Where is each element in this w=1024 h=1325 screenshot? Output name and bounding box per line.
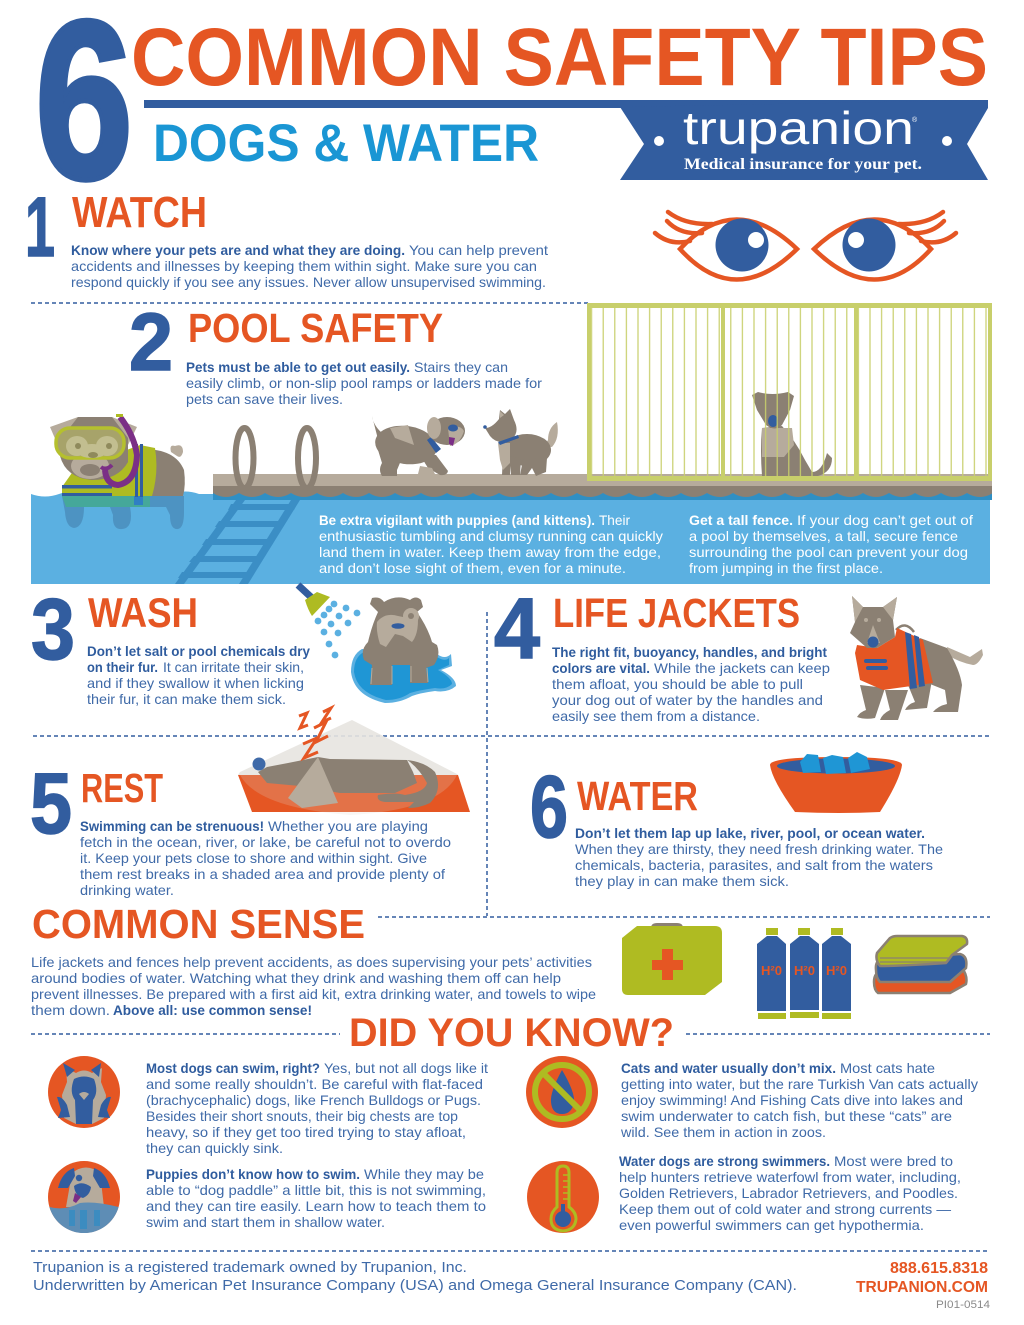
footer legal text: Underwritten by American Pet Insurance Company (USA) and Omega General Insurance Company (CAN). (33, 1277, 797, 1294)
footer contact: TRUPANION.COM (856, 1279, 988, 1296)
section 1 text (71, 242, 548, 290)
common sense text: Life jackets and fences help prevent accidents, as does supervising your pets’ activities (31, 954, 592, 970)
icon: stack of towels (874, 936, 967, 993)
underwater ladder (175, 500, 300, 584)
fact: puppies (146, 1166, 486, 1230)
section 3 text: their fur, it can make them sick. (87, 691, 286, 707)
fact: cats: enjoy swimming! And Fishing Cats dive into lakes and (621, 1092, 963, 1108)
section 1 text: Know where your pets are and what they are doing. (71, 242, 405, 258)
fact: puppies: Puppies don’t know how to swim. (146, 1166, 360, 1182)
fact: water dogs: Most were bred to (834, 1153, 953, 1169)
section 4 heading: LIFE JACKETS (553, 590, 800, 636)
fact: water dogs (619, 1153, 961, 1233)
icon: shower and wet bulldog (298, 585, 456, 703)
fact: dogs swimming: heavy, so if they get too tired trying to stay afloat, (146, 1124, 466, 1140)
section 5 text: Swimming can be strenuous! (80, 818, 264, 834)
section 4 text (552, 644, 830, 724)
section 4 text: While the jackets can keep (654, 660, 830, 676)
fact: water dogs: Keep them out of cold water and strong currents — (619, 1201, 951, 1217)
fence (587, 303, 992, 481)
icon: dog behind fence (752, 392, 832, 476)
fact: puppies: While they may be (364, 1166, 484, 1182)
fact: water dogs: even powerful swimmers can get hypothermia. (619, 1217, 924, 1233)
icon: no water badge (526, 1056, 598, 1128)
section 2 text: Stairs they can (414, 359, 508, 375)
icon: eyes (655, 212, 956, 280)
section 3 heading: WASH (88, 589, 198, 636)
common sense text: prevent illnesses. Be prepared with a first aid kit, extra drinking water, and towels to wipe (31, 986, 596, 1002)
did you know heading: DID YOU KNOW? (349, 1011, 674, 1055)
icon: kitten (483, 409, 558, 476)
header rule (144, 100, 988, 108)
section 4 text: your dog out of water by the handles and (552, 692, 823, 708)
icon: pug with snorkel (50, 414, 185, 529)
subtitle: DOGS & WATER (153, 114, 539, 173)
icon: water bottles: H²0 (794, 963, 815, 978)
section 3 number: 3 (31, 582, 75, 678)
fact: puppies: able to “dog paddle” a little bit, this is not swimming, (146, 1182, 486, 1198)
icon: resting dog on mat (238, 708, 470, 815)
pool text: tall fence: a pool by themselves, a tall, secure fence (689, 528, 958, 544)
pool text: tall fence: from jumping in the first place. (689, 560, 883, 576)
section 5 heading: REST (81, 765, 163, 811)
icon: thermometer badge (527, 1161, 599, 1233)
fact: dogs swimming: Besides their short snouts, their big chests are top (146, 1108, 458, 1124)
section 3 text: and if they swallow it when licking (87, 675, 304, 691)
footer contact (856, 1260, 990, 1311)
section 1 text: accidents and illnesses by keeping them within sight. Make sure you can (71, 258, 537, 274)
common sense text: them down. (31, 1002, 110, 1018)
footer legal text (33, 1259, 797, 1294)
section 6 heading: WATER (577, 773, 698, 819)
icon: puppy swimming badge (48, 1161, 120, 1233)
section 4 text: colors are vital. (552, 660, 650, 676)
icon: dog in life jacket (850, 596, 983, 720)
section 3 text: It can irritate their skin, (163, 659, 304, 675)
fact: puppies: and they can tire easily. Learn how to teach them to (146, 1198, 486, 1214)
section 5 text: Whether you are playing (268, 818, 428, 834)
trupanion ribbon logo: Medical insurance for your pet. (684, 156, 922, 173)
pool text: puppies and kittens: land them in water. Keep them away from the edge, (319, 544, 661, 560)
trupanion ribbon logo: ® (912, 116, 918, 124)
section 2 text: pets can save their lives. (186, 391, 343, 407)
fact: water dogs: help hunters retrieve waterfowl from water, including, (619, 1169, 961, 1185)
section 5 text (80, 818, 451, 898)
icon: water bottles: H²0 (826, 963, 847, 978)
section 4 text: them afloat, you should be able to pull (552, 676, 803, 692)
pool text: puppies and kittens (319, 512, 663, 576)
fact: cats: getting into water, but the rare Turkish Van cats actually (621, 1076, 978, 1092)
section 6 text (575, 825, 943, 889)
pool text: tall fence (689, 512, 973, 576)
fact: dogs swimming (146, 1060, 488, 1156)
pool deck (213, 474, 992, 500)
fact: cats: Most cats hate (840, 1060, 935, 1076)
fact: cats: swim underwater to catch fish, but these “cats” are (621, 1108, 952, 1124)
section 1 text: You can help prevent (409, 242, 548, 258)
common sense text: Above all: use common sense! (113, 1002, 312, 1018)
footer legal text: Trupanion is a registered trademark owned by Trupanion, Inc. (33, 1259, 467, 1276)
section 5 text: fetch in the ocean, river, or lake, be careful not to overdo (80, 834, 451, 850)
section 3 text: on their fur. (87, 659, 158, 675)
fact: cats: Cats and water usually don’t mix. (621, 1060, 836, 1076)
section 2 heading: POOL SAFETY (188, 305, 443, 351)
vertical divider (486, 612, 488, 916)
common sense text (31, 954, 596, 1018)
fact: water dogs: Water dogs are strong swimmers. (619, 1153, 830, 1169)
section 4 number: 4 (494, 581, 540, 677)
pool text: puppies and kittens: Be extra vigilant with puppies (and kittens). (319, 512, 595, 528)
section 6 text: When they are thirsty, they need fresh drinking water. The (575, 841, 943, 857)
icon: water bowl with ice (770, 752, 902, 813)
section 1 heading: WATCH (72, 188, 207, 237)
section 2 text: Pets must be able to get out easily. (186, 359, 410, 375)
fact: puppies: swim and start them in shallow water. (146, 1214, 385, 1230)
trupanion ribbon logo (620, 100, 988, 180)
fact: dogs swimming: and some really shouldn’t. Be careful with flat-faced (146, 1076, 483, 1092)
section 6 text: they play in can make them sick. (575, 873, 789, 889)
section 4 text: The right fit, buoyancy, handles, and bright (552, 644, 827, 660)
section 6 text: Don’t let them lap up lake, river, pool, or ocean water. (575, 825, 925, 841)
pool text: tall fence: If your dog can’t get out of (797, 512, 973, 528)
section 5 number: 5 (30, 756, 72, 852)
icon: bulldog badge (48, 1056, 120, 1128)
trupanion ribbon logo: trupanion (683, 102, 914, 154)
section 5 text: it. Keep your pets close to shore and within sight. Give (80, 850, 427, 866)
pool text: puppies and kittens: Their (599, 512, 630, 528)
fact: dogs swimming: Yes, but not all dogs like it (324, 1060, 488, 1076)
pool ladder rails (236, 428, 316, 488)
section 4 text: easily see them from a distance. (552, 708, 760, 724)
section 2 text (186, 359, 542, 407)
section 3 text (87, 643, 310, 707)
icon: water bottles: H²0 (761, 963, 782, 978)
section 2 text: easily climb, or non-slip pool ramps or ladders made for (186, 375, 542, 391)
pool text: puppies and kittens: and don’t lose sight of them, even for a minute. (319, 560, 626, 576)
section 6 text: chemicals, bacteria, parasites, and salt from the waters (575, 857, 933, 873)
pool text: tall fence: Get a tall fence. (689, 512, 793, 528)
common sense heading: COMMON SENSE (32, 901, 365, 947)
fact: dogs swimming: they can quickly sink. (146, 1140, 283, 1156)
section 2 number: 2 (129, 297, 173, 388)
section 1 text: respond quickly if you see any issues. Never allow unsupervised swimming. (71, 274, 546, 290)
fact: dogs swimming: Most dogs can swim, right? (146, 1060, 320, 1076)
fact: cats (620, 1060, 978, 1140)
pool text: puppies and kittens: enthusiastic tumbling and clumsy running can quickly (319, 528, 663, 544)
section 3 text: Don’t let salt or pool chemicals dry (87, 643, 310, 659)
fact: water dogs: Golden Retrievers, Labrador Retrievers, and Poodles. (619, 1185, 958, 1201)
section 6 number: 6 (530, 757, 568, 856)
footer contact: PI01-0514 (936, 1299, 990, 1311)
common sense text: around bodies of water. Watching what they drink and washing them off can help (31, 970, 561, 986)
section 5 text: them rest breaks in a shaded area and provide plenty of (80, 866, 445, 882)
section 5 text: drinking water. (80, 882, 174, 898)
section 1 number: 1 (25, 180, 55, 274)
fact: dogs swimming: (brachycephalic) dogs, like French Bulldogs or Pugs. (146, 1092, 481, 1108)
icon: puppy (372, 416, 465, 481)
pool water (31, 490, 990, 584)
fact: cats: wild. See them in action in zoos. (620, 1124, 826, 1140)
pool text: tall fence: surrounding the pool can prevent your dog (689, 544, 968, 560)
icon: first aid kit (622, 925, 722, 995)
icon: water bottles (757, 928, 851, 1019)
footer contact: 888.615.8318 (890, 1260, 988, 1277)
